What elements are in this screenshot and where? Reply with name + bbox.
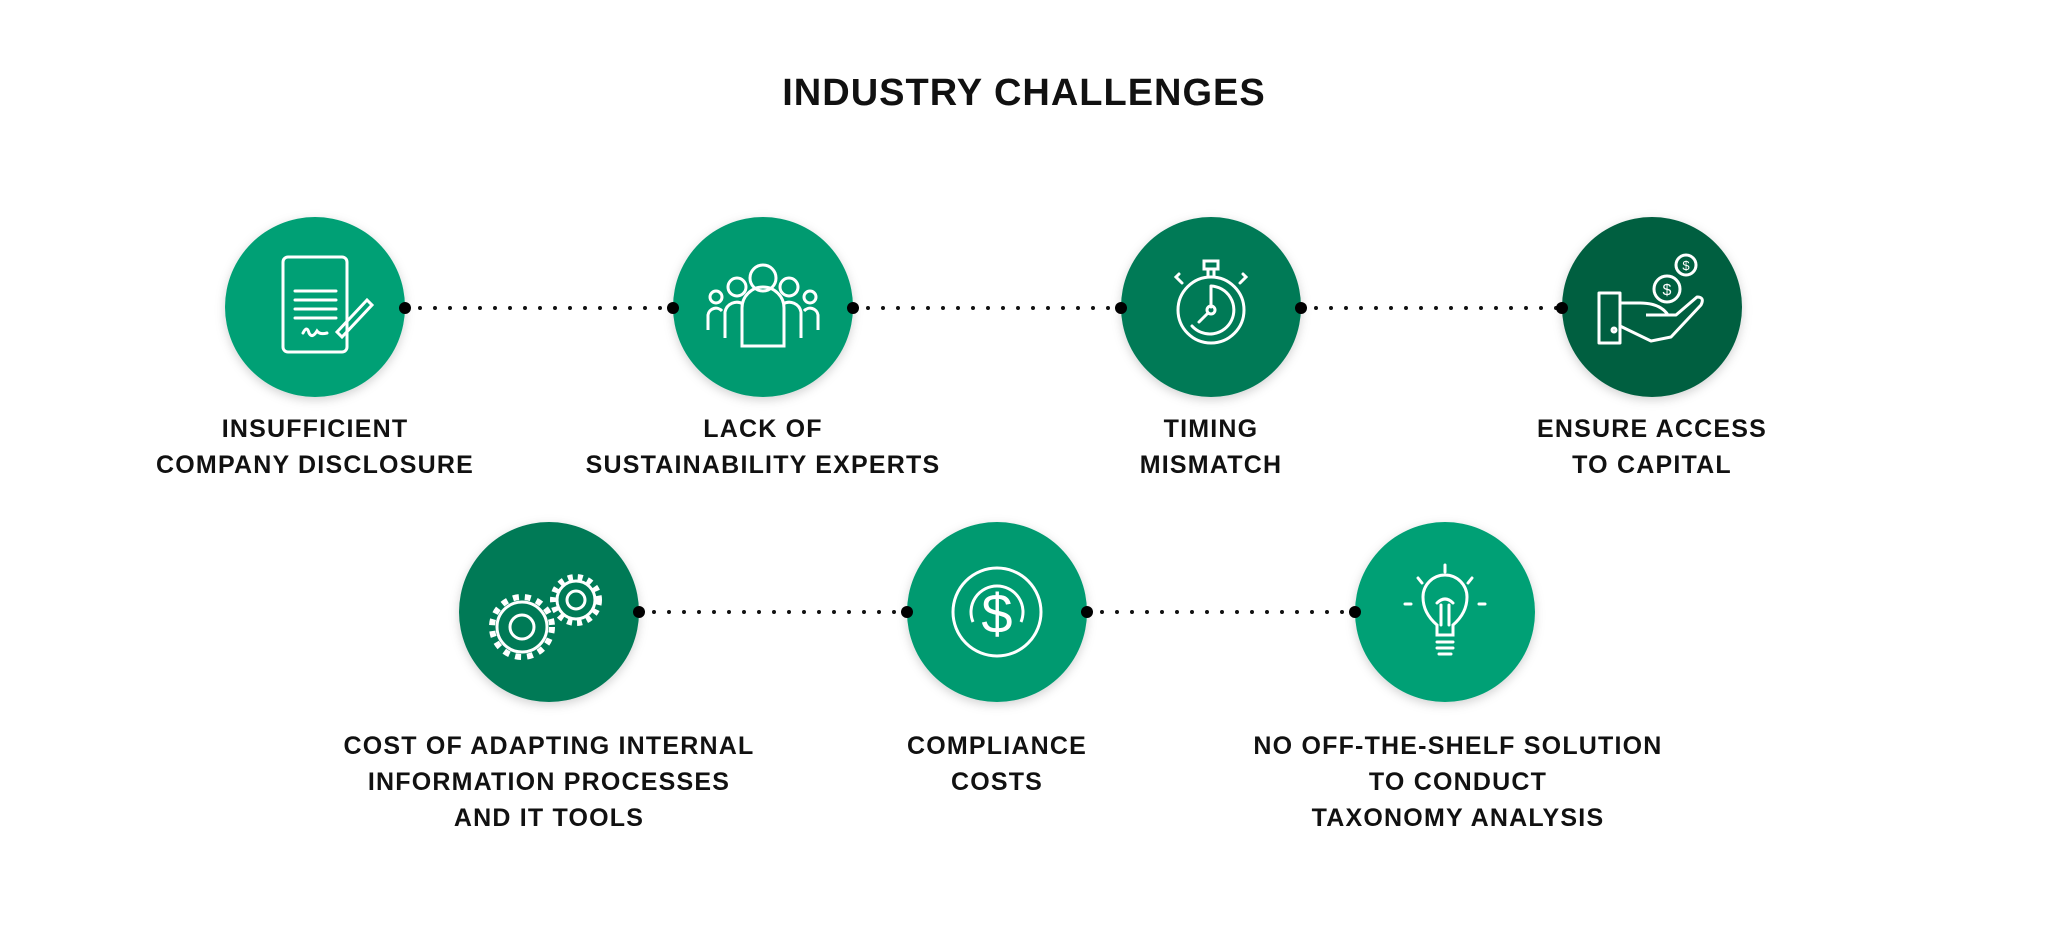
item: compliance costs <box>901 522 1093 796</box>
item: ensure access to capital: $ <box>1682 258 1690 273</box>
label: COMPANY DISCLOSURE <box>156 451 474 479</box>
label: NO OFF-THE-SHELF SOLUTION <box>1253 732 1663 760</box>
label: TO CAPITAL <box>1572 451 1732 479</box>
item: no off-the-shelf solution <box>1253 522 1663 832</box>
label: COSTS <box>951 768 1043 796</box>
label: TO CONDUCT <box>1369 768 1547 796</box>
connector: top row <box>405 306 1562 310</box>
label: INFORMATION PROCESSES <box>368 768 730 796</box>
connector: bottom row <box>639 610 1355 614</box>
item: lack of sustainability experts <box>586 217 940 479</box>
label: TAXONOMY ANALYSIS <box>1312 804 1604 832</box>
label: TIMING <box>1164 415 1258 443</box>
item: ensure access to capital <box>1537 217 1767 479</box>
item: compliance costs: $ <box>981 582 1013 645</box>
label: SUSTAINABILITY EXPERTS <box>586 451 940 479</box>
item: timing mismatch <box>1115 217 1307 479</box>
title: INDUSTRY CHALLENGES <box>782 72 1266 114</box>
icon: gears <box>492 577 599 657</box>
item: insufficient company disclosure <box>156 217 474 479</box>
icon: people <box>708 265 818 346</box>
icon: document with pen <box>283 257 372 352</box>
icon: light bulb <box>1405 565 1485 654</box>
label: ENSURE ACCESS <box>1537 415 1767 443</box>
item: cost of adapting <box>343 522 755 832</box>
label: MISMATCH <box>1140 451 1282 479</box>
icon: hand with coins <box>1599 255 1702 343</box>
item: ensure access to capital: $ <box>1663 282 1672 299</box>
icon: stopwatch <box>1176 261 1246 343</box>
label: LACK OF <box>703 415 823 443</box>
label: AND IT TOOLS <box>454 804 644 832</box>
label: COST OF ADAPTING INTERNAL <box>343 732 755 760</box>
icon: dollar coin <box>953 568 1041 656</box>
label: COMPLIANCE <box>907 732 1087 760</box>
label: INSUFFICIENT <box>222 415 408 443</box>
